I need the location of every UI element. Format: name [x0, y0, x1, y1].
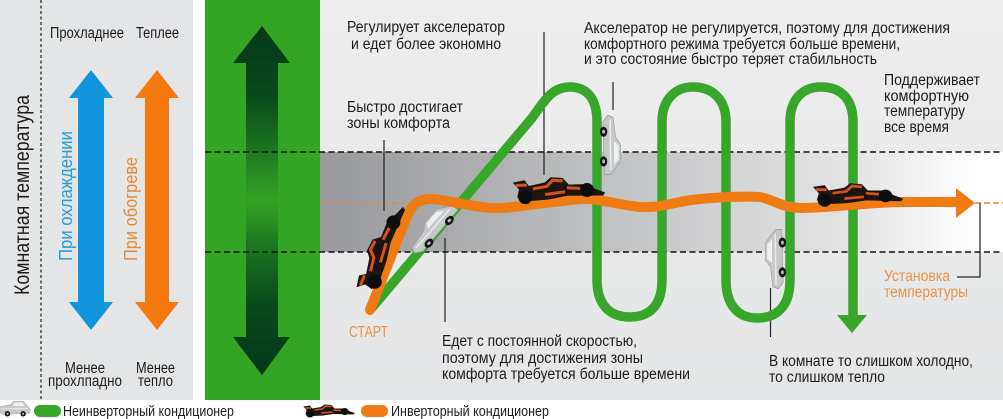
race car: inverter at set point — [813, 183, 903, 207]
text: too cold too warm — [769, 353, 973, 386]
comfort zone band — [320, 152, 1003, 252]
arrow: heating range — [135, 70, 179, 330]
car: non-inverter rising — [405, 199, 461, 258]
leader lines — [384, 32, 980, 337]
race car: inverter stable — [513, 175, 605, 205]
text: reaches comfort zone fast: Быстро достигает — [347, 99, 463, 116]
label: set temperature: температуры — [884, 284, 968, 301]
legend orange swatch — [361, 405, 388, 417]
label: set temperature — [884, 268, 968, 301]
car: non-inverter undershoot — [766, 229, 786, 289]
legend: inverter — [303, 404, 549, 419]
text: constant speed: Едет с постоянной скоростью, — [442, 333, 637, 350]
text: reaches comfort zone fast — [347, 99, 463, 132]
text: maintains temperature: все время — [884, 119, 949, 136]
car: non-inverter overshoot — [600, 115, 620, 175]
heading: warmer: Теплее — [136, 25, 179, 42]
heading: cooler: Прохладнее — [50, 25, 124, 42]
text: too cold too warm: В комнате то слишком холодно, — [769, 353, 973, 370]
label: set temperature: Установка — [884, 268, 950, 285]
panel: green comfort column — [205, 0, 320, 400]
text: regulates throttle: Регулирует акселератор — [347, 19, 505, 36]
legend: non-inverter — [0, 401, 234, 419]
caption: less cool: прохлпадно — [48, 373, 122, 390]
text: regulates throttle: и едет более экономно — [351, 36, 501, 53]
caption: less warm — [136, 360, 175, 390]
panel: room temperature scale — [0, 0, 193, 400]
caption: less cool: Менее — [65, 360, 105, 377]
text: throttle not regulated: комфортного режима требуется больше времени, — [584, 36, 900, 53]
arrow: dark green range — [233, 26, 290, 375]
legend race car icon — [303, 404, 355, 418]
label: when cooling: При охлаждении — [56, 131, 76, 261]
caption: less warm: тепло — [138, 373, 173, 390]
panel: chart area — [205, 0, 1003, 400]
text: too cold too warm: то слишком тепло — [769, 369, 885, 386]
text: maintains temperature — [884, 72, 980, 136]
label: start: СТАРТ — [349, 324, 388, 341]
race car: inverter fast start — [353, 200, 411, 296]
legend car icon — [0, 401, 30, 417]
orange curve: inverter AC — [370, 188, 975, 310]
axis label: room temperature: Комнатная температура — [11, 95, 34, 295]
text: throttle not regulated: и это состояние быстро теряет стабильность — [584, 51, 877, 68]
text: regulates throttle — [347, 19, 505, 53]
text: throttle not regulated: Акселератор не регулируется, поэтому для достижения — [584, 20, 950, 37]
caption: less cool — [48, 360, 122, 390]
text: throttle not regulated — [584, 20, 950, 68]
green curve: non-inverter AC — [370, 87, 867, 333]
text: reaches comfort zone fast: зоны комфорта — [347, 115, 450, 132]
text: maintains temperature: комфортную — [884, 88, 969, 105]
legend green swatch — [34, 405, 61, 417]
text: constant speed — [442, 333, 690, 383]
text: constant speed: поэтому для достижения зоны — [442, 350, 643, 367]
arrow: cooling range — [69, 70, 113, 330]
caption: less warm: Менее — [136, 360, 175, 377]
text: maintains temperature: температуру — [884, 103, 965, 120]
text: maintains temperature: Поддерживает — [884, 72, 980, 89]
text: constant speed: комфорта требуется больше времени — [442, 366, 690, 383]
label: when heating: При обогреве — [121, 157, 141, 261]
